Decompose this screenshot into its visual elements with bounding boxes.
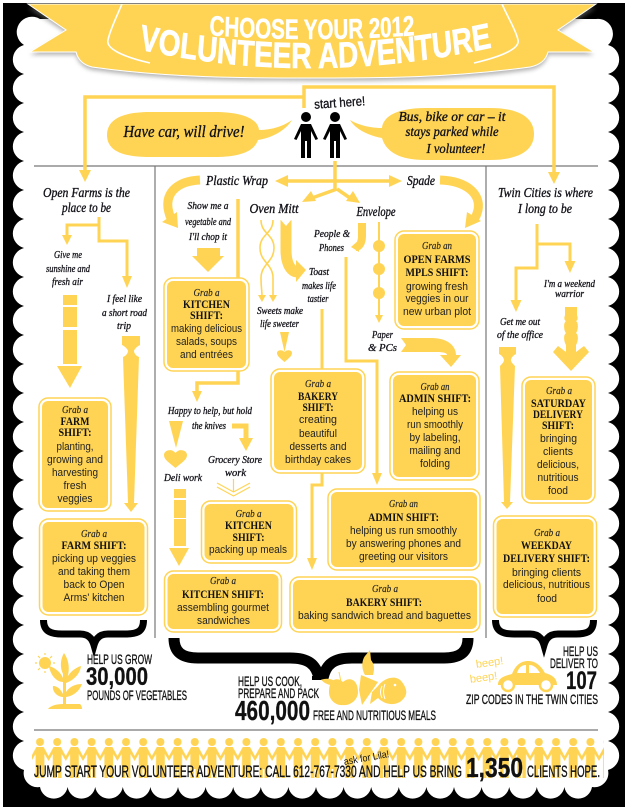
panel: admin shift phones: by answering phones and xyxy=(346,538,461,550)
panel: saturday delivery: delicious, xyxy=(537,459,579,471)
panel: open farms mpls: Grab an xyxy=(422,241,452,252)
text: beep beep xyxy=(469,655,504,686)
panel: farm shift planting: planting, xyxy=(56,441,94,453)
heading: twin cities: Twin Cities is where xyxy=(498,186,593,201)
panel: weekday delivery: food xyxy=(537,593,557,605)
panel: saturday delivery: SHIFT: xyxy=(542,420,574,432)
pillar arrow: farm 2 xyxy=(122,336,140,512)
label: grocery store work: work xyxy=(225,468,246,479)
beaded arrow: envelope to paper xyxy=(373,222,385,323)
big down arrow xyxy=(192,248,224,272)
text: short road trip: a short road xyxy=(102,308,148,319)
text: toast makes life tastier: tastier xyxy=(308,294,329,305)
chevron arrow: grocery xyxy=(217,479,250,496)
text: sweets make life sweeter: life sweeter xyxy=(260,319,300,330)
panel: farm shift planting: FARM xyxy=(60,416,90,428)
panel: kitchen shift sandwiches: Grab a xyxy=(210,576,236,587)
curved arrow: oven mitt to toast xyxy=(280,219,306,282)
panel: kitchen shift salads: KITCHEN xyxy=(183,299,231,311)
panel: farm shift planting: SHIFT: xyxy=(58,427,92,439)
text: show me a vegetable: vegetable and xyxy=(185,217,232,228)
arrows: open farms branches xyxy=(62,217,132,288)
text: give me sunshine: Give me xyxy=(54,250,82,261)
panel: bakery shift cakes xyxy=(271,369,365,473)
arrow: knives to grocery xyxy=(232,426,253,451)
panel: farm shift picking: picking up veggies xyxy=(52,553,136,565)
text: short road trip: I feel like xyxy=(106,294,142,305)
icon: apple, carrot and fish xyxy=(322,650,406,705)
curved arrow: paper to admin xyxy=(401,338,461,367)
panel: kitchen shift sandwiches xyxy=(164,571,282,632)
panel: admin shift labeling: ADMIN SHIFT: xyxy=(399,393,471,405)
text: people and phones: People & xyxy=(313,229,351,240)
stat: deliver zip codes xyxy=(466,643,598,707)
label: spade: Spade xyxy=(407,174,435,189)
pencil arrow: farm xyxy=(57,295,82,388)
text: beep beep: beep! xyxy=(469,670,498,686)
panel: admin shift phones: Grab an xyxy=(389,499,418,510)
panel: kitchen shift sandwiches: assembling gourmet xyxy=(177,602,269,614)
curved arrow: envelope to phones xyxy=(351,223,362,252)
heading: open farms: place to be xyxy=(61,201,111,216)
arrow: phones to admin xyxy=(346,257,382,485)
panel: weekday delivery: bringing clients xyxy=(512,567,581,579)
text: show me a vegetable: I'll chop it xyxy=(188,232,228,243)
panel: farm shift picking: Arms' kitchen xyxy=(64,592,124,604)
text: weekend warrior: warrior xyxy=(555,289,585,300)
icon: plant xyxy=(48,653,82,709)
curved arrow: plastic wrap xyxy=(162,180,200,228)
pencil arrow: deli xyxy=(169,489,189,566)
label: envelope: Envelope xyxy=(356,205,396,220)
label: oven mitt: Oven Mitt xyxy=(250,202,299,217)
panel: bakery shift baguettes: Grab a xyxy=(372,584,398,595)
panel: kitchen shift salads: SHIFT: xyxy=(190,310,223,322)
panel: kitchen shift salads: salads, soups xyxy=(176,336,237,348)
braided arrows: oven mitt xyxy=(258,220,277,302)
stat: grow vegetables: POUNDS OF VEGETABLES xyxy=(87,687,187,703)
panel: weekday delivery: DELIVERY SHIFT: xyxy=(503,553,590,565)
panel: kitchen shift sandwiches: KITCHEN SHIFT: xyxy=(182,589,264,601)
panel: kitchen shift packing: Grab a xyxy=(236,509,262,520)
panel: open farms mpls: growing fresh xyxy=(406,281,468,293)
stat: deliver zip codes: HELP US xyxy=(563,643,598,659)
panel: kitchen shift packing xyxy=(202,501,296,563)
panel: kitchen shift packing: packing up meals xyxy=(209,544,287,556)
panel: farm shift planting: fresh xyxy=(64,480,86,492)
panel: admin shift phones: greeting our visitors xyxy=(359,551,448,563)
panel: kitchen shift packing: SHIFT: xyxy=(232,532,264,544)
panel: kitchen shift salads: and entrées xyxy=(180,349,233,361)
label: grocery store work xyxy=(208,455,262,479)
panel: farm shift planting: veggies xyxy=(58,493,93,505)
brace: middle xyxy=(174,638,468,680)
text: show me a vegetable: Show me a xyxy=(188,201,228,212)
line: toast to bakery xyxy=(320,309,324,369)
panel: admin shift labeling: run smoothly xyxy=(407,419,463,431)
panel: saturday delivery: clients xyxy=(543,446,573,458)
icon: two people xyxy=(294,112,347,158)
text: sweets make life sweeter: Sweets make xyxy=(257,306,303,317)
panel: saturday delivery: DELIVERY xyxy=(533,409,584,421)
panel: bakery shift cakes: BAKERY xyxy=(298,391,339,403)
text: paper and pcs: Paper xyxy=(371,330,394,341)
stat: grow vegetables: HELP US GROW xyxy=(87,651,152,667)
speech bubble: bus bike or car xyxy=(350,108,534,160)
heading: twin cities xyxy=(498,186,593,217)
panel: admin shift phones: helping us run smoothly xyxy=(350,525,457,537)
panel: open farms mpls: MPLS SHIFT: xyxy=(406,267,468,279)
text: show me a vegetable xyxy=(185,201,232,243)
panel: bakery shift baguettes: BAKERY SHIFT: xyxy=(346,597,422,609)
call to action: 1,350 xyxy=(466,752,523,783)
panel: admin shift labeling: Grab an xyxy=(420,382,450,393)
panel: farm shift picking: FARM SHIFT: xyxy=(62,540,126,552)
panel: kitchen shift sandwiches: sandwiches xyxy=(197,615,250,627)
text: people and phones xyxy=(313,229,351,254)
stat: deliver zip codes: 107 xyxy=(566,667,597,695)
panel: bakery shift cakes: desserts and xyxy=(290,441,346,453)
panel: farm shift planting: Grab a xyxy=(62,405,88,416)
panel: admin shift phones xyxy=(328,489,480,570)
panel: admin shift labeling: mailing and xyxy=(410,445,460,457)
curved arrow: spade xyxy=(440,180,481,228)
speech bubble: have car: Have car, will drive! xyxy=(123,122,244,141)
panel: farm shift planting: growing and xyxy=(47,454,103,466)
stat: grow vegetables: 30,000 xyxy=(86,663,148,691)
stat: cook meals: HELP US COOK, xyxy=(238,673,302,689)
text: beep beep: beep! xyxy=(475,655,504,671)
panel: farm shift picking: back to Open xyxy=(64,579,124,591)
icon: arrow with heart xyxy=(277,332,292,362)
pillar arrow: weekday xyxy=(499,347,516,509)
panel: farm shift picking: Grab a xyxy=(81,529,107,540)
panel: kitchen shift salads: Grab a xyxy=(194,288,220,299)
start here label: start here! xyxy=(314,93,366,112)
people chain xyxy=(32,736,604,780)
panel: admin shift labeling: folding xyxy=(420,458,450,470)
panel: bakery shift baguettes: baking sandwich bread and baguettes xyxy=(298,610,471,622)
panel: open farms mpls: new urban plot xyxy=(403,306,471,318)
panel: weekday delivery: Grab a xyxy=(534,528,560,539)
stat: grow vegetables xyxy=(86,651,187,703)
panel: admin shift labeling: helping us xyxy=(412,406,458,418)
text: weekend warrior xyxy=(543,279,596,300)
text: give me sunshine: fresh air xyxy=(52,277,84,288)
stat: cook meals xyxy=(235,673,436,726)
arrow: bakery to baguettes xyxy=(307,473,322,570)
arrow line: plastic wrap to deli or grocery xyxy=(192,199,238,402)
text: give me sunshine xyxy=(46,250,91,288)
panel: saturday delivery: food xyxy=(548,485,568,497)
text: weekend warrior: I'm a weekend xyxy=(543,279,596,290)
panel: open farms mpls: OPEN FARMS xyxy=(404,254,470,266)
heading: open farms xyxy=(43,186,130,216)
label: grocery store work: Grocery Store xyxy=(208,455,262,466)
text: short road trip xyxy=(102,294,148,332)
text: happy to help: the knives xyxy=(192,421,226,432)
brace: left xyxy=(44,620,144,645)
stat: cook meals: 460,000 xyxy=(235,695,310,726)
bead arrow: saturday xyxy=(553,307,589,371)
panel: open farms mpls xyxy=(395,231,479,329)
speech bubble: bus bike or car: I volunteer! xyxy=(426,142,486,157)
panel: bakery shift cakes: beautiful xyxy=(299,428,337,440)
speech bubble: bus bike or car: stays parked while xyxy=(406,125,498,140)
text: get me out: Get me out xyxy=(500,317,541,328)
speech bubble: bus bike or car: Bus, bike or car – it xyxy=(398,110,507,125)
panel: farm shift picking xyxy=(40,519,148,615)
arrows: central decision split xyxy=(275,161,402,203)
panel: admin shift labeling: by labeling, xyxy=(410,432,460,444)
panel: admin shift labeling xyxy=(390,372,479,480)
text: toast makes life tastier xyxy=(302,267,336,305)
panel: kitchen shift packing: KITCHEN xyxy=(225,520,273,532)
text: happy to help xyxy=(167,406,253,432)
text: get me out xyxy=(497,317,543,341)
panel: open farms mpls: veggies in our xyxy=(406,293,469,305)
panel: saturday delivery: SATURDAY xyxy=(531,398,587,410)
panel: farm shift picking: and taking them xyxy=(58,566,130,578)
panel: bakery shift baguettes xyxy=(290,577,480,632)
text: give me sunshine: sunshine and xyxy=(46,264,91,275)
panel: saturday delivery: bringing xyxy=(540,433,577,445)
panel: bakery shift cakes: Grab a xyxy=(305,379,331,390)
panel: admin shift phones: ADMIN SHIFT: xyxy=(368,512,439,524)
label: plastic wrap: Plastic Wrap xyxy=(205,174,268,189)
heading: twin cities: I long to be xyxy=(517,202,572,217)
panel: bakery shift cakes: SHIFT: xyxy=(302,402,334,414)
divider lines xyxy=(34,166,598,730)
panel: kitchen shift salads: making delicious xyxy=(171,323,242,335)
stat: cook meals: FREE AND NUTRITIOUS MEALS xyxy=(313,707,436,723)
call to action: ask for Lila! xyxy=(343,749,390,768)
brace: right xyxy=(496,620,594,645)
text: short road trip: trip xyxy=(117,321,131,332)
panel: bakery shift cakes: creating xyxy=(299,414,337,426)
panel: weekday delivery: delicious, nutritious xyxy=(503,579,590,591)
panel: weekday delivery xyxy=(494,516,596,617)
arrows: twin cities branches xyxy=(510,224,576,312)
text: people and phones: Phones xyxy=(318,243,344,254)
title line 1: CHOOSE YOUR 2012 xyxy=(210,16,414,40)
title ribbon xyxy=(26,4,598,84)
icon: arrow with heart, deli xyxy=(164,421,187,468)
text: toast makes life tastier: makes life xyxy=(302,281,336,292)
panel: saturday delivery xyxy=(522,377,595,503)
panel: kitchen shift salads xyxy=(164,278,249,371)
text: toast makes life tastier: Toast xyxy=(309,267,330,278)
arrow: start split to left and right columns xyxy=(79,87,560,184)
label: deli work: Deli work xyxy=(163,473,202,484)
speech bubble: have car xyxy=(107,112,292,157)
panel: farm shift planting xyxy=(39,398,111,511)
panel: farm shift planting: harvesting xyxy=(52,467,98,479)
call to action xyxy=(34,749,600,783)
text: paper and pcs xyxy=(368,330,397,354)
stat: cook meals: PREPARE AND PACK xyxy=(238,685,319,701)
icon: sun xyxy=(35,653,55,673)
text: happy to help: Happy to help, but hold xyxy=(167,406,253,417)
heading: open farms: Open Farms is the xyxy=(43,186,130,201)
panel: bakery shift cakes: birthday cakes xyxy=(285,454,351,466)
panel: saturday delivery: Grab a xyxy=(546,386,572,397)
panel: weekday delivery: WEEKDAY xyxy=(521,540,573,552)
text: get me out: of the office xyxy=(497,330,543,341)
title line 2: VOLUNTEER ADVENTURE xyxy=(142,23,492,68)
icon: car xyxy=(498,661,557,691)
text: sweets make life sweeter xyxy=(257,306,303,330)
panel: saturday delivery: nutritious xyxy=(538,472,579,484)
text: paper and pcs: & PCs xyxy=(368,343,397,354)
